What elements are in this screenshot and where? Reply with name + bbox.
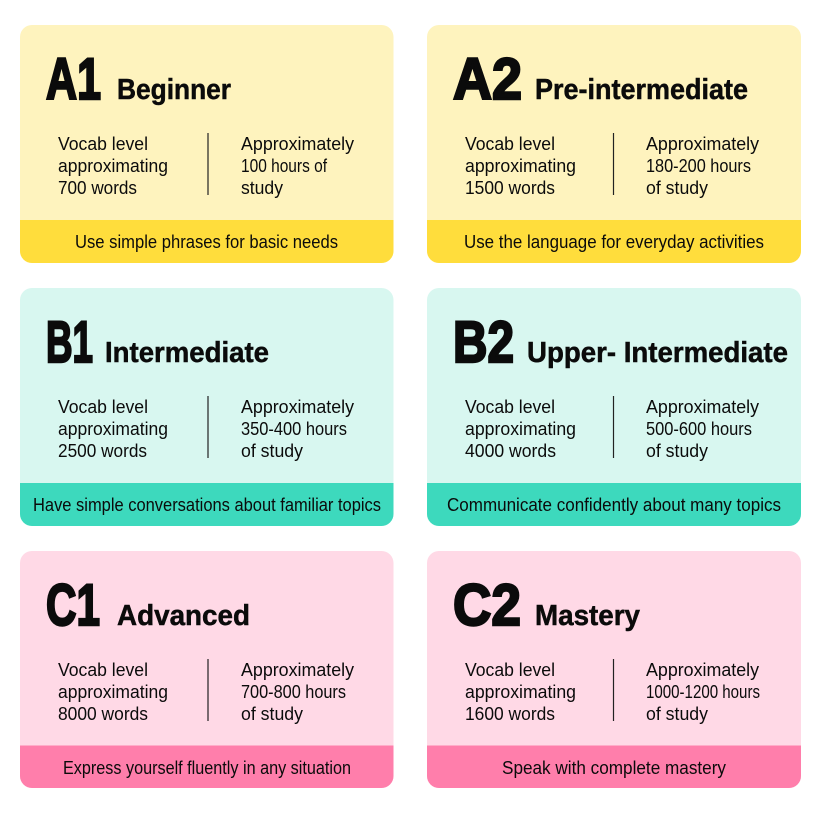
text: study hours: Approximately (241, 660, 354, 680)
text: vocabulary level (465, 397, 576, 461)
heading: C1 Advanced: C1 (46, 573, 100, 638)
text: study hours: study (241, 178, 283, 198)
panel: C1 Advanced (20, 551, 394, 788)
text: vocabulary level: approximating (465, 419, 576, 439)
heading: A1 Beginner: A1 (46, 47, 101, 112)
text: study hours (241, 134, 354, 198)
text: study hours: 180-200 hours (646, 156, 751, 176)
heading: A2 Pre-intermediate: Pre-intermediate (535, 74, 748, 106)
heading: C2 Mastery (453, 573, 640, 638)
heading: B2 Upper-Intermediate: B2 (453, 310, 514, 375)
heading: B1 Intermediate: Intermediate (105, 337, 269, 369)
text: study hours: 700-800 hours (241, 682, 346, 702)
heading: B2 Upper-Intermediate (453, 310, 788, 375)
banner text: B2 ability: Communicate confidently about many topics (447, 495, 781, 515)
text: vocabulary level: 1600 words (465, 704, 555, 724)
text: study hours: Approximately (646, 397, 759, 417)
panel: B1 Intermediate (20, 288, 394, 526)
text: vocabulary level: approximating (465, 156, 576, 176)
text: vocabulary level: Vocab level (58, 397, 148, 417)
text: study hours: Approximately (646, 660, 759, 680)
text: vocabulary level: 2500 words (58, 441, 147, 461)
heading: C1 Advanced: Advanced (117, 600, 250, 632)
text: study hours: Approximately (646, 134, 759, 154)
panel: C2 Mastery (427, 551, 801, 788)
text: study hours: Approximately (241, 134, 354, 154)
panel: A2 Pre-intermediate (427, 25, 801, 263)
text: vocabulary level: 4000 words (465, 441, 556, 461)
panel: B2 Upper-Intermediate (427, 288, 801, 526)
text: study hours: 100 hours of (241, 156, 328, 176)
text: study hours: 500-600 hours (646, 419, 752, 439)
text: study hours: of study (646, 704, 708, 724)
text: vocabulary level: approximating (58, 156, 168, 176)
heading: C1 Advanced (46, 573, 250, 638)
text: vocabulary level: Vocab level (465, 397, 555, 417)
text: vocabulary level: 1500 words (465, 178, 555, 198)
text: vocabulary level: Vocab level (58, 134, 148, 154)
heading: A1 Beginner: Beginner (117, 74, 231, 106)
text: vocabulary level: Vocab level (58, 660, 148, 680)
banner text: A2 ability: Use the language for everyday activities (464, 232, 764, 252)
text: vocabulary level (58, 134, 168, 198)
text: vocabulary level (58, 660, 168, 724)
text: study hours: 350-400 hours (241, 419, 347, 439)
banner text: C2 ability: Speak with complete mastery (502, 758, 726, 778)
text: study hours: of study (646, 441, 708, 461)
text: vocabulary level: 8000 words (58, 704, 148, 724)
text: study hours (646, 397, 759, 461)
banner text: C1 ability: Express yourself fluently in any situation (63, 758, 351, 778)
text: study hours: of study (646, 178, 708, 198)
text: study hours: Approximately (241, 397, 354, 417)
text: vocabulary level (58, 397, 168, 461)
text: study hours: of study (241, 704, 303, 724)
heading: C2 Mastery: C2 (453, 573, 521, 638)
text: vocabulary level: Vocab level (465, 134, 555, 154)
text: study hours: 1000-1200 hours (646, 682, 760, 702)
heading: B2 Upper-Intermediate: Upper- Intermediate (527, 337, 788, 369)
heading: B1 Intermediate: B1 (46, 310, 93, 375)
heading: A2 Pre-intermediate: A2 (453, 47, 522, 112)
text: vocabulary level: approximating (465, 682, 576, 702)
banner text: A1 ability: Use simple phrases for basic needs (75, 232, 338, 252)
panel: A1 Beginner (20, 25, 394, 263)
text: study hours (241, 397, 354, 461)
text: vocabulary level (465, 660, 576, 724)
text: vocabulary level: 700 words (58, 178, 137, 198)
heading: C2 Mastery: Mastery (535, 600, 640, 632)
text: vocabulary level: Vocab level (465, 660, 555, 680)
text: study hours (241, 660, 354, 724)
banner text: B1 ability: Have simple conversations about familiar topics (33, 495, 381, 515)
text: study hours (646, 660, 760, 724)
text: vocabulary level: approximating (58, 419, 168, 439)
text: vocabulary level: approximating (58, 682, 168, 702)
text: vocabulary level (465, 134, 576, 198)
heading: A2 Pre-intermediate (453, 47, 748, 112)
heading: A1 Beginner (46, 47, 231, 112)
text: study hours (646, 134, 759, 198)
text: study hours: of study (241, 441, 303, 461)
heading: B1 Intermediate (46, 310, 269, 375)
